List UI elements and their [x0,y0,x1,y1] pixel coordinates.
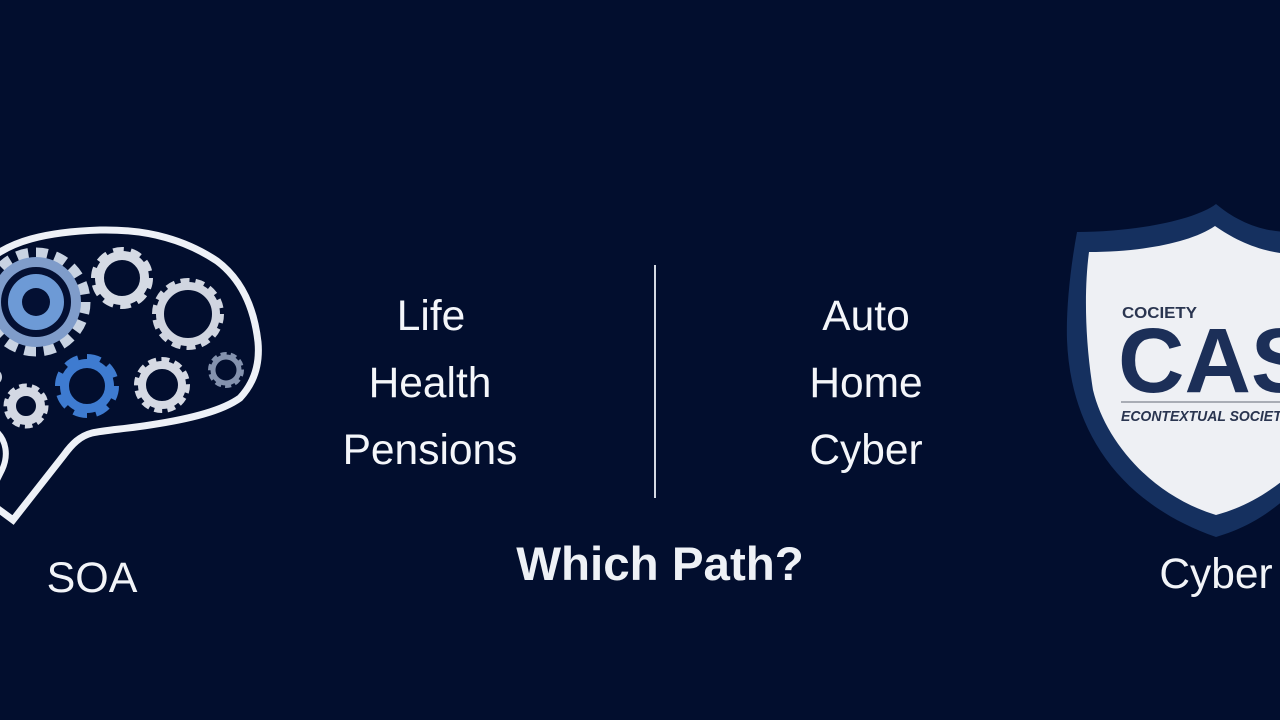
heading: Which Path?: Which Path? [516,538,804,591]
gear: small lower left [6,386,46,426]
icon: CAS shield [1067,204,1280,537]
gear: large blue main gear [0,253,85,351]
text: Life: Life [397,293,465,340]
gear: top right [154,280,222,348]
gear: blue [58,357,116,415]
text: Auto: Auto [822,293,910,340]
gear: top middle [94,250,150,306]
list: CAS specialties [809,293,923,474]
gear: lower middle [136,360,188,410]
text: Home: Home [809,360,923,407]
text: Cyber: Cyber [809,427,923,474]
shield outer border [1067,204,1280,537]
label: Cyber: Cyber [1159,551,1273,598]
gear: clipped edge fragment [0,369,2,385]
label: SOA: SOA [47,554,138,602]
list: SOA specialties [343,293,517,474]
brain outline [0,230,258,520]
vertical divider [654,265,656,498]
text: Pensions: Pensions [343,427,517,474]
shield inner panel [1086,226,1280,515]
partial brain stem curve [0,431,6,482]
text: Health: Health [369,360,491,407]
shield rule [1121,401,1280,403]
gear: small grey right [210,354,242,386]
shield small top text: COCIETY [1122,305,1197,322]
icon: brain with gears [0,230,258,520]
